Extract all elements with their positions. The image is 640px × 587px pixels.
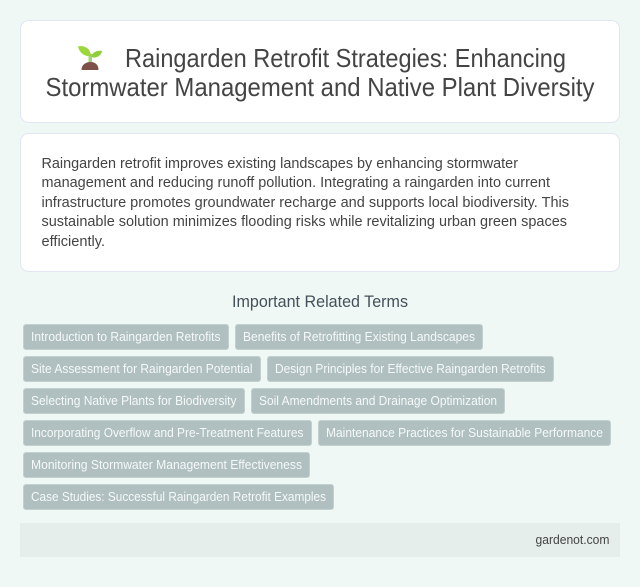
tag: Benefits of Retrofitting Existing Landscapes: [243, 330, 475, 344]
tag: Site Assessment for Raingarden Potential: [31, 362, 252, 376]
text block: description paragraph: efficiently.: [42, 233, 105, 250]
footer: gardenot.com: [536, 533, 610, 547]
panel: description: [20, 134, 620, 272]
tag: [24, 484, 334, 510]
text block: description paragraph: [42, 155, 569, 250]
tag: [24, 324, 228, 350]
tag: [268, 356, 554, 382]
text block: description paragraph: sustainable solution minimizes flooding risks while revitalizing urban green spaces: [42, 213, 567, 230]
icon: seedling: [78, 46, 102, 70]
heading: related terms: Important Related Terms: [232, 293, 408, 311]
title: Stormwater Management and Native Plant Diversity: [46, 72, 594, 102]
title: [46, 43, 594, 102]
tag: Maintenance Practices for Sustainable Performance: [326, 426, 603, 440]
tag: Selecting Native Plants for Biodiversity: [31, 394, 237, 408]
text block: description paragraph: infrastructure promotes groundwater recharge and supports local biodiversity. This: [42, 194, 569, 211]
panel: title card: [20, 20, 620, 122]
tag: [236, 324, 482, 350]
tag: Design Principles for Effective Raingarden Retrofits: [275, 362, 546, 376]
tag: [318, 420, 610, 446]
tag: Monitoring Stormwater Management Effectiveness: [31, 458, 302, 472]
text block: description paragraph: management and reducing runoff pollution. Integrating a raingarden into current: [42, 174, 551, 191]
title: Raingarden Retrofit Strategies: Enhancing: [125, 43, 566, 73]
panel: related term tags: [24, 324, 610, 510]
tag: [24, 452, 310, 478]
tag: [252, 388, 504, 414]
tag: Introduction to Raingarden Retrofits: [31, 330, 220, 344]
tag: Incorporating Overflow and Pre-Treatment Features: [31, 426, 304, 440]
footer: [20, 523, 620, 557]
text block: description paragraph: Raingarden retrofit improves existing landscapes by enhancing stormwater: [42, 155, 518, 172]
tag: [24, 356, 260, 382]
tag: [24, 388, 244, 414]
tag: Soil Amendments and Drainage Optimization: [259, 394, 497, 408]
tag: [24, 420, 312, 446]
tag: Case Studies: Successful Raingarden Retrofit Examples: [31, 490, 326, 504]
